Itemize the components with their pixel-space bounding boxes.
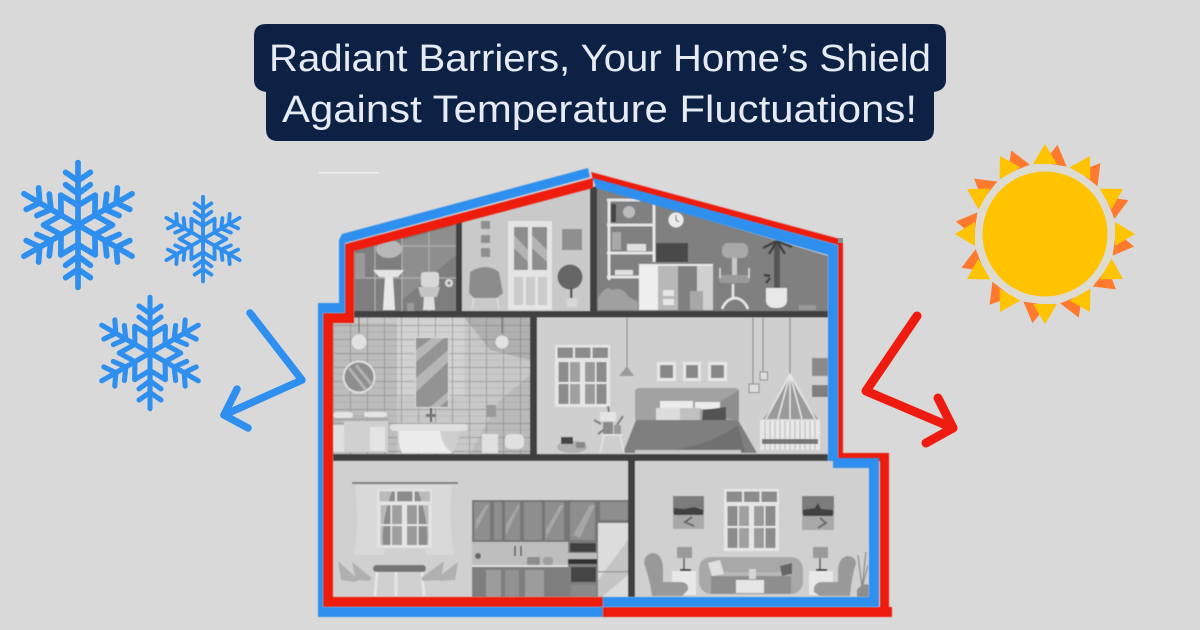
sun disc bbox=[982, 172, 1108, 296]
radiant barrier: red inner layer, left side bbox=[323, 178, 603, 607]
room: middle-left tiled bathroom bbox=[333, 317, 530, 454]
lower cabinets bbox=[472, 565, 568, 597]
sun orange rays bbox=[954, 143, 1136, 325]
clock bbox=[668, 212, 684, 228]
title banner: Against Temperature Fluctuations! bbox=[282, 89, 917, 131]
sofa bbox=[699, 557, 803, 594]
sun ring bbox=[975, 164, 1115, 304]
fridge bbox=[598, 523, 628, 597]
title banner bbox=[254, 24, 946, 141]
tall mirror bbox=[415, 337, 449, 408]
icon: small snowflake bbox=[162, 197, 244, 281]
sheer curtains bbox=[353, 485, 455, 555]
room: upper-right study bbox=[597, 186, 828, 311]
house cutaway bbox=[333, 186, 869, 597]
faint white line above house bbox=[319, 172, 379, 174]
floors and partition walls bbox=[333, 186, 828, 597]
arrow: blue cold reflected away bbox=[224, 313, 302, 428]
crib with canopy bbox=[760, 318, 820, 450]
upper cabinets bbox=[472, 500, 628, 542]
palm plant bbox=[763, 241, 792, 308]
potted branch bbox=[857, 552, 869, 597]
pendant lamp bbox=[619, 318, 634, 376]
bed bbox=[623, 388, 757, 453]
hanging lights bbox=[749, 318, 768, 392]
roof corner cap bbox=[838, 238, 843, 243]
radiant barrier: blue outer layer, left side bbox=[318, 168, 603, 617]
curtain rod bbox=[352, 482, 458, 484]
desk bbox=[639, 264, 713, 310]
window bbox=[555, 345, 610, 407]
room: middle-right bedroom bbox=[537, 317, 828, 454]
three framed pictures bbox=[657, 362, 727, 381]
room: upper-middle lounge with door bbox=[462, 188, 590, 311]
oven column bbox=[568, 542, 598, 597]
left landscape picture bbox=[673, 496, 704, 529]
small wall pictures bbox=[812, 358, 828, 397]
round mirror bbox=[342, 360, 376, 394]
room: upper-left bathroom bbox=[354, 222, 456, 311]
radiant barrier: blue inner layer, right side bbox=[593, 178, 879, 607]
title banner: Radiant Barriers, Your Home’s Shield bbox=[269, 38, 931, 80]
window bbox=[377, 489, 432, 548]
coffee table bbox=[736, 569, 764, 593]
floor items bbox=[557, 437, 587, 453]
arrow: red heat reflected away bbox=[866, 316, 953, 443]
bathtub bbox=[390, 408, 468, 453]
side table with flowers bbox=[594, 406, 624, 453]
monitor bbox=[656, 243, 688, 262]
armchairs bbox=[644, 553, 856, 596]
sun yellow rays bbox=[955, 144, 1135, 324]
side tables and lamps bbox=[672, 547, 833, 595]
window bbox=[724, 489, 779, 551]
office chair bbox=[719, 243, 750, 309]
room: lower-right living room bbox=[635, 461, 869, 597]
room: lower-left dining kitchen bbox=[333, 461, 628, 597]
dining table bbox=[373, 565, 426, 596]
icon: middle snowflake bbox=[96, 297, 204, 409]
floor plant bbox=[598, 288, 638, 310]
dining chairs bbox=[338, 561, 458, 582]
icon: sun bbox=[954, 143, 1136, 325]
icon: large snowflake bbox=[18, 163, 138, 287]
backsplash and utensils bbox=[472, 542, 568, 565]
radiant barrier: red outer layer, right side bbox=[591, 172, 892, 617]
vanity bbox=[333, 412, 389, 452]
right landscape picture bbox=[802, 496, 834, 530]
bookshelf bbox=[607, 199, 655, 280]
